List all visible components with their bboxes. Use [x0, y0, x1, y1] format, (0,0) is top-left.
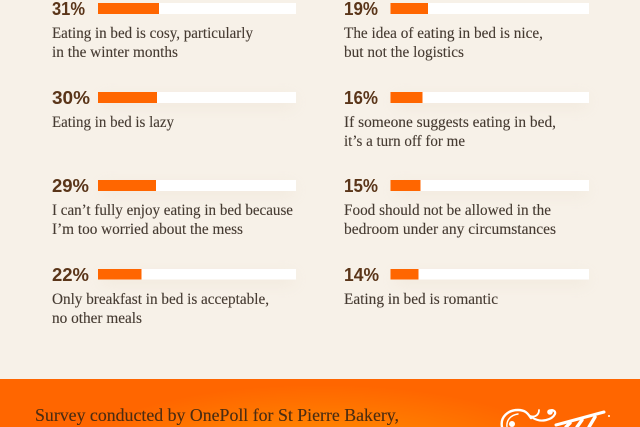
stat: 15% bedroom: 15% — [344, 175, 378, 196]
stat: 19% logistics — [344, 0, 589, 61]
stat: 14% romantic — [344, 264, 589, 308]
stat: 16% turn off: If someone suggests eating in bed, — [344, 114, 556, 131]
stat: 22% breakfast — [52, 264, 296, 327]
stat: 22% breakfast: Only breakfast in bed is acceptable, — [52, 291, 269, 308]
stat: 22% breakfast: no other meals — [52, 310, 142, 327]
stat: 30% lazy: 30% — [52, 87, 90, 108]
stat: 16% turn off: 16% — [344, 87, 378, 108]
stat: 31% cosy: Eating in bed is cosy, particularly — [52, 25, 253, 42]
stat: 15% bedroom — [344, 175, 589, 238]
stat: 31% cosy — [52, 0, 296, 61]
stat: 16% turn off — [344, 87, 589, 150]
stat: 29% mess — [52, 175, 296, 238]
stat: 15% bedroom: Food should not be allowed in the — [344, 202, 551, 219]
stat: 22% breakfast: 22% — [52, 264, 89, 285]
stat: 29% mess: I can’t fully enjoy eating in bed because — [52, 202, 293, 219]
stat: 31% cosy: in the winter months — [52, 44, 178, 61]
stat: 14% romantic: Eating in bed is romantic — [344, 291, 498, 308]
stat: 19% logistics: but not the logistics — [344, 44, 464, 61]
stat: 15% bedroom: bedroom under any circumstances — [344, 221, 556, 238]
stat: 30% lazy: Eating in bed is lazy — [52, 114, 174, 131]
stat: 29% mess: 29% — [52, 175, 89, 196]
stat: 29% mess: I’m too worried about the mess — [52, 221, 243, 238]
footer source text: Survey conducted by OnePoll for St Pierre Bakery, — [35, 405, 399, 425]
stat: 30% lazy — [52, 87, 296, 131]
icon: St Pierre logo flourish — [502, 409, 610, 427]
stat: 19% logistics: The idea of eating in bed is nice, — [344, 25, 543, 42]
footer panel — [0, 379, 640, 427]
stat: 16% turn off: it’s a turn off for me — [344, 133, 465, 150]
stat: 14% romantic: 14% — [344, 264, 379, 285]
